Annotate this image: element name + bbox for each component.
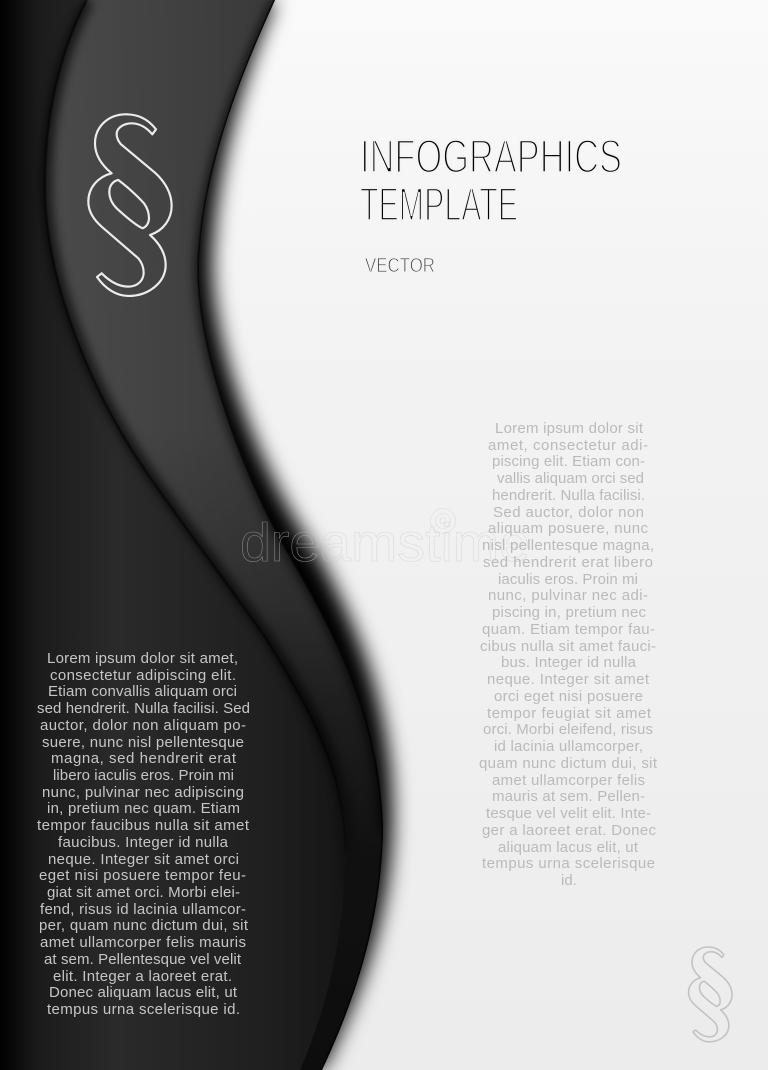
text block: right column: vallis aliquam orci sed [497,470,644,487]
text block: left column: auctor, dolor non aliquam po- [40,717,246,734]
text block: left column: libero iaculis eros. Proin mi [53,767,234,784]
text block: right column: tempus urna scelerisque [482,855,655,872]
panel: grey inner band [40,0,383,1070]
text block: right column: aliquam posuere, nunc [488,520,648,537]
text block: right column: nisl pellentesque magna, [482,537,654,554]
text block: left column: fend, risus id lacinia ullamcor- [40,901,246,918]
text block: right column: quam. Etiam tempor fau- [482,621,655,638]
text block: left column [37,650,250,1018]
text block: right column: mauris at sem. Pellen- [492,788,645,805]
text block: right column: Lorem ipsum dolor sit [495,420,644,437]
text block: right column: orci eget nisi posuere [494,688,643,705]
text block: left column: sed hendrerit. Nulla facilisi. Sed [37,700,250,717]
text block: left column: Lorem ipsum dolor sit amet, [47,650,238,667]
text block: right column: Sed auctor, dolor non [493,504,644,521]
text block: right column: id lacinia ullamcorper, [494,738,643,755]
text block: left column: per, quam nunc dictum dui, sit [39,917,249,934]
text block: right column: tesque vel velit elit. Inte- [486,805,651,822]
text block: right column: amet, consectetur adi- [488,437,648,454]
watermark: dreamstime [240,513,530,573]
text block: right column: iaculis eros. Proin mi [498,571,638,588]
text block: left column: eget nisi posuere tempor feu- [39,867,246,884]
title [360,130,622,230]
text block: left column: faucibus. Integer id nulla [58,834,229,851]
text block: left column: suere, nunc nisl pellentesque [42,734,244,751]
subtitle: VECTOR [365,255,435,277]
text block: left column: magna, sed hendrerit erat [51,750,237,767]
text block: left column: neque. Integer sit amet orci [48,851,239,868]
text block: left column: elit. Integer a laoreet erat. [53,968,232,985]
title: TEMPLATE [360,178,518,230]
text block: right column: sed hendrerit erat libero [483,554,653,571]
text block: left column: Etiam convallis aliquam orci [48,683,237,700]
text block: left column: giat sit amet orci. Morbi elei- [47,884,240,901]
text block: right column: neque. Integer sit amet [487,671,650,688]
text block: left column: Donec aliquam lacus elit, ut [49,984,238,1001]
title: INFOGRAPHICS [360,130,622,182]
text block: right column: bus. Integer id nulla [501,654,637,671]
text block: right column [479,420,658,889]
text block: right column: ger a laoreet erat. Donec [482,822,656,839]
text block: left column: consectetur adipiscing elit. [50,667,236,684]
panel: dark wave [0,0,383,1070]
text block: left column: at sem. Pellentesque vel velit [44,951,242,968]
text block: right column: piscing in, pretium nec [492,604,646,621]
text block: left column: nunc, pulvinar nec adipiscing [42,784,244,801]
text block: right column: cibus nulla sit amet fauci- [480,638,656,655]
text block: right column: aliquam lacus elit, ut [498,839,639,856]
text block: right column: amet ullamcorper felis [492,772,645,789]
text block: right column: hendrerit. Nulla facilisi. [492,487,645,504]
text block: right column: tempor feugiat sit amet [487,705,652,722]
icon: section sign white outline [88,114,172,296]
text block: right column: id. [561,872,577,889]
text block: left column: amet ullamcorper felis mauris [40,934,246,951]
text block: right column: piscing elit. Etiam con- [492,453,645,470]
text block: left column: tempus urna scelerisque id. [47,1001,240,1018]
text block: right column: quam nunc dictum dui, sit [479,755,658,772]
text block: left column: tempor faucibus nulla sit amet [37,817,250,834]
icon: section sign grey outline [689,947,732,1042]
shadow of dark wave [0,0,392,1070]
text block: left column: in, pretium nec quam. Etiam [47,800,240,817]
text block: right column: nunc, pulvinar nec adi- [488,587,648,604]
text block: right column: orci. Morbi eleifend, risus [483,721,653,738]
